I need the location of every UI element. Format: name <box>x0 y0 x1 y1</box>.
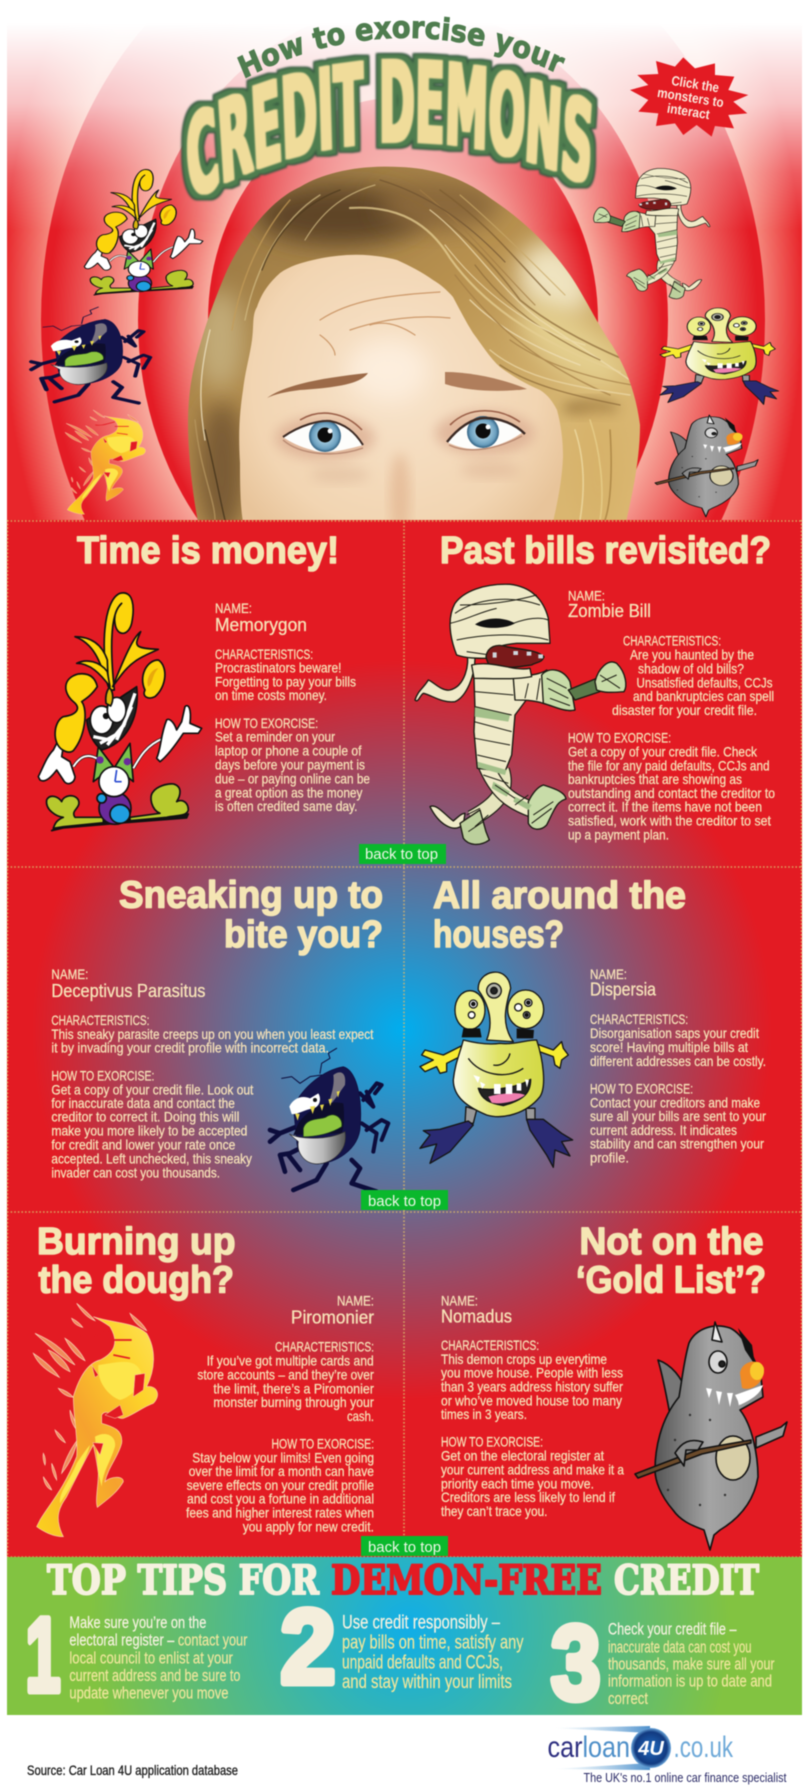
text block: This demon crops up everytime <box>441 1351 607 1367</box>
heading: Not on the <box>580 1221 764 1263</box>
text block: profile. <box>590 1149 629 1165</box>
panel: Time is money <box>38 530 370 831</box>
heading: Past bills revisited? <box>440 530 771 572</box>
small monster: Dispersia <box>660 308 779 405</box>
monster: Dispersia <box>420 972 573 1167</box>
heading <box>119 875 383 956</box>
text block: creditor to correct it. Doing this will <box>51 1109 239 1125</box>
tips heading: CREDIT <box>614 1557 759 1604</box>
text block: make you more likely to be accepted <box>51 1123 247 1139</box>
panel: Sneaking up to bite you <box>51 875 388 1192</box>
text block <box>568 588 775 843</box>
text block: cash. <box>347 1408 374 1424</box>
monster: Memorygon <box>38 593 202 831</box>
text block: priority each time you move. <box>441 1475 594 1491</box>
text block: HOW TO EXORCISE: <box>568 729 671 745</box>
text block: different addresses can be costly. <box>590 1053 766 1069</box>
text block: HOW TO EXORCISE: <box>590 1080 693 1096</box>
tip 1: 1 <box>26 1597 60 1714</box>
text block: disaster for your credit file. <box>612 702 757 718</box>
text block: they can’t trace you. <box>441 1503 548 1519</box>
monster: Deceptivus Parasitus <box>270 1048 388 1192</box>
text block: your current address and make it a <box>441 1461 624 1477</box>
text block: Get a copy of your credit file. Check <box>568 743 758 759</box>
panel: Not on the Gold List <box>441 1221 787 1550</box>
text block: the file for any paid defaults, CCJs and <box>568 757 770 773</box>
text block: up a payment plan. <box>568 827 669 843</box>
text block <box>441 1293 624 1519</box>
tip 1 <box>26 1597 248 1714</box>
tip 2: unpaid defaults and CCJs, <box>342 1652 503 1674</box>
text block: HOW TO EXORCISE: <box>441 1433 543 1449</box>
heading: Burning up <box>37 1221 236 1263</box>
logo: carloan4u.co.uk: 4U <box>637 1738 664 1760</box>
text block: Deceptivus Parasitus <box>51 981 205 1001</box>
tip 3 <box>551 1605 775 1722</box>
text block: If you’ve got multiple cards and <box>207 1353 374 1369</box>
text block: the limit, there’s a Piromonier <box>213 1380 374 1396</box>
logo: carloan4u.co.uk <box>548 1726 787 1785</box>
tip 2: Use credit responsibly – <box>342 1612 500 1634</box>
monster: Piromonier <box>33 1303 158 1537</box>
heading: houses? <box>433 914 564 956</box>
text block: NAME: <box>441 1293 478 1309</box>
badge: click the monsters: interact <box>666 101 711 122</box>
text block: it by invading your credit profile with incorrect data. <box>51 1040 329 1056</box>
text block: NAME: <box>337 1293 374 1309</box>
text block: Forgetting to pay your bills <box>215 674 356 690</box>
heading: Sneaking up to <box>119 875 383 917</box>
tips heading: DEMON-FREE <box>331 1557 602 1604</box>
text block: Are you haunted by the <box>630 647 754 663</box>
tips heading: TOP TIPS FOR <box>47 1557 320 1604</box>
tip 2 <box>280 1589 524 1706</box>
text block: NAME: <box>51 966 88 982</box>
text block: Stay below your limits! Even going <box>192 1449 374 1465</box>
heading: Time is money! <box>77 530 339 572</box>
text block: stability and can strengthen your <box>590 1136 764 1152</box>
text block: This sneaky parasite creeps up on you when you least expect <box>51 1026 373 1042</box>
text block: Unsatisfied defaults, CCJs <box>636 674 772 690</box>
text block <box>590 966 766 1165</box>
text block: CHARACTERISTICS: <box>215 646 313 662</box>
text block: NAME: <box>215 600 252 616</box>
text block: satisfied, work with the creditor to set <box>568 813 771 829</box>
tip 1: local council to enlist at your <box>69 1649 233 1668</box>
text block: Nomadus <box>441 1306 512 1326</box>
heading <box>37 1221 236 1302</box>
monster: Nomadus <box>635 1322 787 1550</box>
text block: HOW TO EXORCISE: <box>272 1435 374 1451</box>
text block: CHARACTERISTICS: <box>441 1337 539 1353</box>
text block: score! Having multiple bills at <box>590 1039 748 1055</box>
small monster: Deceptivus Parasitus <box>31 307 150 403</box>
text block: you apply for new credit. <box>243 1518 374 1534</box>
text block: fees and higher interest rates when <box>186 1505 374 1521</box>
tip 3: Check your credit file – <box>608 1620 737 1639</box>
tip 2: and stay within your limits <box>342 1672 512 1693</box>
monster: Zombie Bill <box>415 584 626 844</box>
tip 2: 2 <box>280 1589 336 1706</box>
text block: a great option as the money <box>215 784 362 800</box>
text block: Contact your creditors and make <box>590 1094 760 1110</box>
badge: click the monsters <box>630 57 748 137</box>
logo: carloan4u.co.uk: .co.uk <box>674 1731 734 1764</box>
tip 1: electoral register – contact your <box>69 1631 248 1650</box>
text block: correct it. If the items have not been <box>568 799 762 815</box>
header background with concentric rings <box>6 32 803 521</box>
text block: and bankruptcies can spell <box>633 688 774 704</box>
text block: CHARACTERISTICS: <box>275 1338 374 1354</box>
text block: CHARACTERISTICS: <box>51 1012 149 1028</box>
text block: Disorganisation saps your credit <box>590 1025 759 1041</box>
heading <box>433 875 686 956</box>
text block: Get a copy of your credit file. Look out <box>51 1081 253 1097</box>
badge: click the monsters: Click the <box>670 73 721 95</box>
text block <box>51 966 373 1180</box>
source note: Source: Car Loan 4U application database <box>27 1762 238 1778</box>
text block: times in 3 years. <box>441 1406 527 1422</box>
text block: sure all your bills are sent to your <box>590 1108 766 1124</box>
text block: HOW TO EXORCISE: <box>51 1067 154 1083</box>
text block: CHARACTERISTICS: <box>590 1011 688 1027</box>
badge: click the monsters: monsters to <box>656 85 725 110</box>
text block: bankruptcies that are showing as <box>568 771 742 787</box>
text block: Zombie Bill <box>568 601 651 621</box>
tip 1: current address and be sure to <box>69 1666 240 1685</box>
tip 3: 3 <box>551 1605 600 1722</box>
heading: All around the <box>433 875 686 917</box>
text block: is often credited same day. <box>215 798 358 814</box>
text block: CHARACTERISTICS: <box>623 633 721 649</box>
text block: Piromonier <box>291 1307 374 1327</box>
panel: Burning up the dough <box>33 1221 374 1537</box>
small monster: Zombie Bill <box>594 168 710 299</box>
text block: NAME: <box>568 588 605 604</box>
text block: for credit and lower your rate once <box>51 1137 236 1153</box>
text block: severe effects on your credit profile <box>187 1477 374 1493</box>
tip 2: pay bills on time, satisfy any <box>342 1632 524 1654</box>
text block: shadow of old bills? <box>638 660 744 676</box>
small monster: Piromonier <box>65 410 146 514</box>
text block: NAME: <box>590 966 627 982</box>
text block: or who’ve moved house too many <box>441 1392 622 1408</box>
text block: due – or paying online can be <box>215 770 370 786</box>
text block <box>186 1293 374 1534</box>
button: back to top 3: back to top <box>368 1539 441 1556</box>
text block: accepted. Left unchecked, this sneaky <box>51 1150 252 1166</box>
panel: All around the houses <box>420 875 766 1167</box>
button: back to top 1: back to top <box>365 846 438 863</box>
heading <box>576 1221 766 1302</box>
tips heading <box>47 1557 759 1604</box>
text block: days before your payment is <box>215 756 365 772</box>
text block: Procrastinators beware! <box>215 660 342 676</box>
heading: ‘Gold List’? <box>576 1260 766 1302</box>
tip 3: correct <box>608 1689 648 1708</box>
text block: you move house. People with less <box>441 1365 623 1381</box>
panel: top tips <box>7 1557 802 1722</box>
text block: Memorygon <box>215 615 307 635</box>
text block: Get on the electoral register at <box>441 1447 604 1463</box>
title: CREDIT DEMONS: CREDIT DEMONS <box>180 51 600 202</box>
heading: the dough? <box>38 1260 234 1302</box>
text block: current address. It indicates <box>590 1122 737 1138</box>
tip 1: Make sure you’re on the <box>69 1613 206 1632</box>
text block: and cost you a fortune in additional <box>187 1491 374 1507</box>
panel: Past bills revisited <box>415 530 775 844</box>
text block: monster burning through your <box>213 1394 374 1410</box>
text block: than 3 years address history suffer <box>441 1378 623 1394</box>
small monster: Memorygon <box>84 170 203 295</box>
text block: over the limit for a month can have <box>189 1463 374 1479</box>
title line: How to exorcise your: How to exorcise your <box>236 16 566 79</box>
small monster: Nomadus <box>655 415 758 517</box>
text block: Dispersia <box>590 980 657 1000</box>
text block <box>215 600 370 814</box>
text block: laptop or phone a couple of <box>215 743 362 759</box>
heading: bite you? <box>224 914 383 956</box>
button: back to top 2: back to top <box>368 1193 441 1210</box>
text block: Creditors are less likely to lend if <box>441 1489 615 1505</box>
photo: worried woman's face <box>188 167 640 540</box>
text block: HOW TO EXORCISE: <box>215 715 318 731</box>
tip 1: update whenever you move <box>69 1683 228 1702</box>
text block: for inaccurate data and contact the <box>51 1095 235 1111</box>
text block: on time costs money. <box>215 687 327 703</box>
text block: outstanding and contact the creditor to <box>568 785 775 801</box>
logo: carloan4u.co.uk: carloan <box>548 1731 630 1764</box>
text block: Set a reminder on your <box>215 729 335 745</box>
text block: store accounts – and they’re over <box>197 1367 374 1383</box>
panel background for six demon sections <box>7 520 802 1557</box>
text block: invader can cost you thousands. <box>51 1164 220 1180</box>
